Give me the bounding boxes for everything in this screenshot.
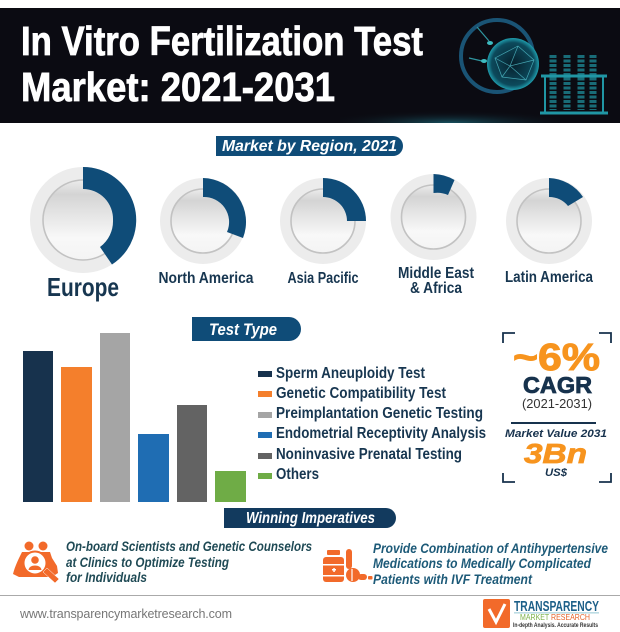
donut: Europe [30,167,136,302]
heading: winning imperatives: Winning Imperatives [246,510,375,527]
legend: test type: Others [276,466,319,483]
CAGR value: ~6% [513,337,600,379]
donut: Asia Pacific [280,178,366,287]
icon: test tubes [540,55,608,113]
label: Middle East & Africa [398,265,475,297]
callout: CAGR and market value: (2021-2031) [522,396,592,411]
title: In Vitro Fertilization Test [21,18,423,64]
title [21,18,423,110]
logo: Transparency Market Research: MARKET RESEARCH [520,613,590,622]
text: imperative two: Patients with IVF Treatment [373,571,533,587]
label: Middle East & Africa: Middle East [398,265,475,282]
text: imperative one: at Clinics to Optimize Testing [66,554,229,570]
text: imperative one [66,538,312,585]
donut: North America [158,178,254,287]
market value: Market Value 2031 [505,428,607,440]
legend: test type [258,365,486,483]
logo: Transparency Market Research: In-depth Analysis. Accurate Results [513,623,599,629]
text: imperative two [373,540,608,587]
header banner [0,8,620,123]
icon: embryo globe in circle [461,20,539,92]
label: Middle East & Africa: & Africa [410,280,462,297]
bar chart: test type [23,333,246,502]
label: Latin America: Latin America [505,269,593,286]
callout: CAGR and market value: CAGR [523,372,592,398]
legend: test type: Preimplantation Genetic Testing [276,405,483,422]
callout: CAGR and market value: 3Bn [524,438,587,469]
footer url: www.transparencymarketresearch.com [19,607,232,621]
text: imperative two: Medications to Medically Complicated [373,555,591,571]
label: Europe: Europe [47,272,119,302]
callout: CAGR and market value [503,333,611,482]
legend: test type: Noninvasive Prenatal Testing [276,446,462,463]
label: North America: North America [158,270,254,287]
label: Asia Pacific: Asia Pacific [288,270,359,287]
text: imperative one: On-board Scientists and Genetic Counselors [66,538,312,554]
legend: test type: Sperm Aneuploidy Test [276,365,426,382]
legend: test type: Endometrial Receptivity Analysis [276,425,486,442]
icon: medication bottle and pills [323,549,372,582]
donut: Middle East & Africa [390,174,476,297]
heading: market by region: Market by Region, 2021 [222,138,397,155]
heading: test type [192,317,301,341]
text: imperative one: for Individuals [66,569,147,585]
icon: people with magnifier [13,542,59,583]
donut: Latin America [505,178,593,286]
legend: test type: Genetic Compatibility Test [276,385,447,402]
callout: CAGR and market value: US$ [545,467,568,479]
logo: Transparency Market Research [483,598,599,629]
title: Market: 2021-2031 [21,64,335,110]
heading: test type: Test Type [209,320,277,339]
